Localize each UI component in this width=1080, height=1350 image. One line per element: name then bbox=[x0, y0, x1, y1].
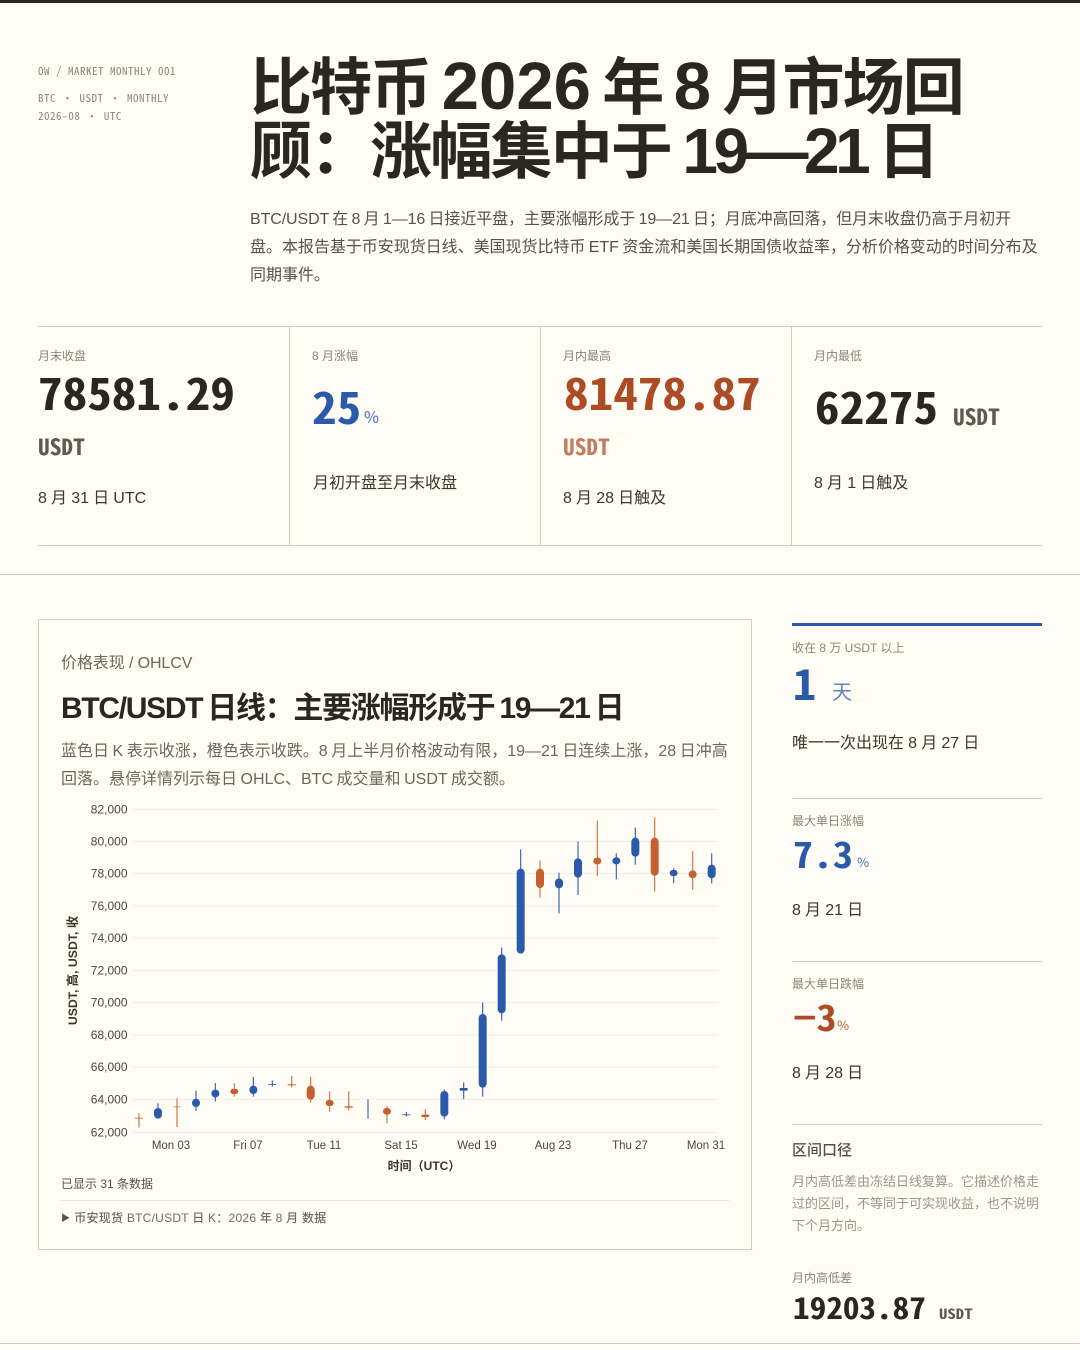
title: 顾：涨幅集中于 19—21 日 bbox=[250, 115, 938, 187]
lead paragraph: 盘。本报告基于币安现货日线、美国现货比特币 ETF 资金流和美国长期国债收益率，分析价格变动的时间分布及 bbox=[250, 239, 1038, 256]
y axis labels: 74,000 bbox=[91, 931, 128, 945]
row count: 已显示 31 条数据 bbox=[61, 1177, 153, 1191]
header meta: OW / MARKET MONTHLY 001 bbox=[38, 63, 176, 79]
title bbox=[250, 49, 963, 187]
sidebar: biggest daily drop bbox=[792, 977, 864, 1082]
stat: monthly high: 8 月 28 日触及 bbox=[563, 490, 666, 507]
stat: monthly low: 月内最低 bbox=[814, 349, 862, 363]
sidebar: biggest daily gain: 7.3 bbox=[793, 827, 853, 879]
stat: monthly high: USDT bbox=[563, 430, 610, 462]
sidebar: range note bbox=[792, 1142, 1039, 1328]
x axis labels: Wed 19 bbox=[457, 1140, 497, 1152]
x axis labels: Sat 15 bbox=[384, 1140, 418, 1152]
chart description: 回落。悬停详情列示每日 OHLC、BTC 成交量和 USDT 成交额。 bbox=[61, 771, 515, 788]
chart description bbox=[61, 742, 728, 788]
lead paragraph: BTC/USDT 在 8 月 1—16 日接近平盘，主要涨幅形成于 19—21 日；月底冲高回落，但月末收盘仍高于月初开 bbox=[250, 211, 1011, 228]
y axis labels: 72,000 bbox=[91, 964, 128, 978]
stat: August gain bbox=[312, 349, 457, 492]
stat: August gain: 8 月涨幅 bbox=[312, 349, 358, 363]
x axis labels: Thu 27 bbox=[612, 1140, 648, 1152]
panel: price chart card bbox=[38, 619, 752, 1250]
y axis labels: 78,000 bbox=[91, 866, 128, 880]
x axis labels: Mon 03 bbox=[152, 1140, 190, 1152]
stat: monthly low bbox=[814, 349, 1000, 492]
stat: monthly low: 8 月 1 日触及 bbox=[814, 475, 908, 492]
sidebar: biggest daily drop: % bbox=[837, 1015, 849, 1034]
stat: monthly high: 月内最高 bbox=[563, 349, 611, 363]
sidebar: biggest daily gain: % bbox=[857, 852, 869, 871]
sidebar: days above 80k: 天 bbox=[832, 682, 852, 704]
y axis title: USDT, 高, USDT, 收 bbox=[65, 915, 80, 1025]
candles: Aug 1-14 bbox=[135, 1076, 391, 1128]
data disclosure: ▶ 币安现货 BTC/USDT 日 K：2026 年 8 月 数据 bbox=[61, 1211, 327, 1225]
sidebar: range note: 过的区间，不等同于可实现收益，也不说明 bbox=[792, 1196, 1039, 1211]
sidebar: range note: 19203.87 bbox=[793, 1284, 926, 1328]
sidebar: range note: USDT bbox=[939, 1304, 973, 1324]
x axis labels: Fri 07 bbox=[233, 1140, 263, 1152]
sidebar: biggest daily gain: 8 月 21 日 bbox=[792, 902, 863, 919]
sidebar: days above 80k: 唯一一次出现在 8 月 27 日 bbox=[792, 735, 979, 752]
x axis labels: Tue 11 bbox=[307, 1140, 341, 1152]
sidebar: biggest daily drop: −3 bbox=[793, 990, 837, 1042]
stat: monthly low: USDT bbox=[953, 400, 1000, 432]
stat: month-end close bbox=[38, 349, 235, 507]
y axis labels: 66,000 bbox=[91, 1060, 128, 1074]
y axis labels: 80,000 bbox=[91, 834, 128, 848]
stat: month-end close: 8 月 31 日 UTC bbox=[38, 490, 146, 507]
chart description: 蓝色日 K 表示收涨，橙色表示收跌。8 月上半月价格波动有限，19—21 日连续上涨，28 日冲高 bbox=[61, 743, 728, 760]
stat: month-end close: 78581.29 bbox=[38, 359, 235, 423]
stat: August gain: 25 bbox=[312, 373, 361, 437]
y axis labels: 62,000 bbox=[91, 1126, 128, 1140]
sidebar: biggest daily gain bbox=[792, 814, 869, 919]
top bar bbox=[0, 0, 1080, 3]
sidebar: biggest daily gain: 最大单日涨幅 bbox=[792, 814, 864, 828]
sidebar: range note: 区间口径 bbox=[792, 1142, 852, 1159]
header meta: BTC · USDT · MONTHLY bbox=[38, 90, 169, 106]
sidebar: days above 80k bbox=[792, 623, 1042, 752]
header meta bbox=[38, 63, 176, 124]
lead paragraph bbox=[250, 210, 1038, 284]
y axis labels: 64,000 bbox=[91, 1092, 128, 1106]
KPI strip bbox=[38, 326, 1042, 546]
x axis labels: Mon 31 bbox=[687, 1140, 725, 1152]
y axis labels: 70,000 bbox=[91, 996, 128, 1010]
x axis title: 时间（UTC） bbox=[388, 1159, 460, 1173]
stat: August gain: 月初开盘至月末收盘 bbox=[313, 475, 457, 492]
stat: monthly high: 81478.87 bbox=[564, 359, 761, 423]
sidebar: range note: 月内高低差由冻结日线复算。它描述价格走 bbox=[792, 1174, 1039, 1189]
chart heading: BTC/USDT 日线：主要涨幅形成于 19—21 日 bbox=[61, 692, 623, 725]
candles: Aug 15-31 bbox=[402, 817, 716, 1120]
x axis labels bbox=[152, 1140, 725, 1152]
y axis labels: 76,000 bbox=[91, 899, 128, 913]
sidebar: range note: 月内高低差 bbox=[792, 1271, 852, 1285]
stat: monthly high bbox=[563, 349, 761, 507]
eyebrow: 价格表现 / OHLCV bbox=[61, 655, 192, 672]
y axis labels bbox=[91, 802, 128, 1140]
stat: month-end close: 月末收盘 bbox=[38, 349, 86, 363]
y axis labels: 68,000 bbox=[91, 1028, 128, 1042]
lead paragraph: 同期事件。 bbox=[250, 267, 330, 284]
x axis labels: Aug 23 bbox=[535, 1140, 571, 1152]
stat: month-end close: USDT bbox=[38, 430, 85, 462]
y axis labels: 82,000 bbox=[91, 802, 128, 816]
sidebar: biggest daily drop: 最大单日跌幅 bbox=[792, 977, 864, 991]
sidebar: range note: 下个月方向。 bbox=[792, 1218, 870, 1233]
header meta: 2026–08 · UTC bbox=[38, 108, 122, 124]
stat: monthly low: 62275 bbox=[815, 373, 938, 437]
sidebar: days above 80k: 收在 8 万 USDT 以上 bbox=[792, 641, 904, 655]
sidebar: days above 80k: 1 bbox=[793, 652, 816, 713]
stat: August gain: % bbox=[364, 404, 379, 428]
y gridlines bbox=[133, 810, 718, 1132]
sidebar: biggest daily drop: 8 月 28 日 bbox=[792, 1065, 863, 1082]
title: 比特币 2026 年 8 月市场回 bbox=[250, 49, 963, 124]
